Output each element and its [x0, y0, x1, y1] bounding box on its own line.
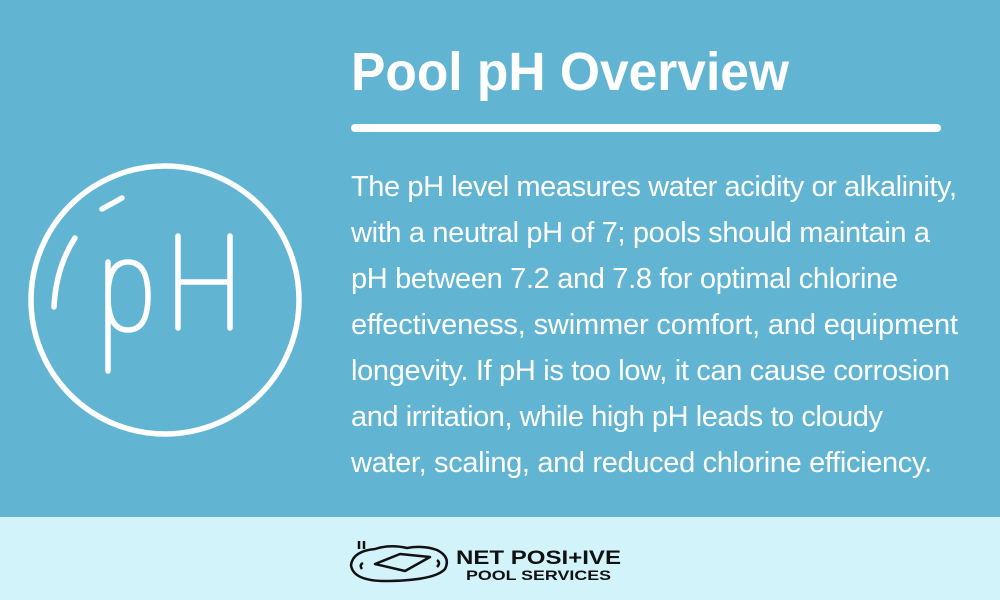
- description text: [350, 171, 958, 479]
- description text: The pH level measures water acidity or alkalinity,: [351, 171, 957, 203]
- description text: longevity. If pH is too low, it can cause corrosion: [351, 355, 950, 387]
- description text: with a neutral pH of 7; pools should maintain a: [350, 217, 931, 249]
- description text: effectiveness, swimmer comfort, and equipment: [351, 309, 958, 341]
- title underline: [351, 124, 941, 132]
- logo: POOL SERVICES: [466, 567, 611, 583]
- logo: [350, 541, 621, 583]
- footer band: [0, 517, 1000, 600]
- description text: and irritation, while high pH leads to cloudy: [351, 401, 884, 433]
- description text: water, scaling, and reduced chlorine efficiency.: [350, 447, 932, 479]
- title: Pool pH Overview: [351, 42, 790, 102]
- icon: pH circle: [28, 163, 302, 437]
- description text: pH between 7.2 and 7.8 for optimal chlorine: [351, 263, 898, 295]
- logo: NET POSI+IVE: [456, 548, 621, 569]
